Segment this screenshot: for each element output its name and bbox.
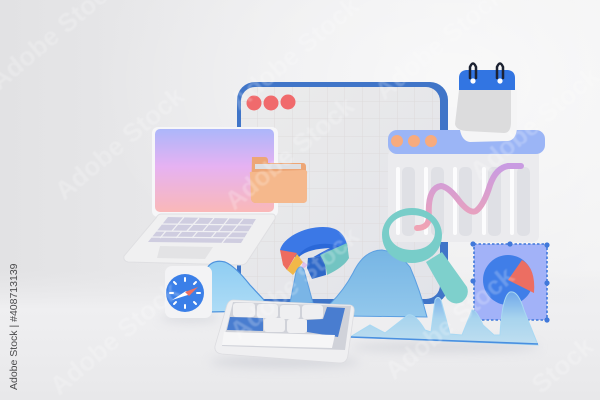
- donut blue top surface: [280, 227, 348, 258]
- pie chart: [483, 255, 533, 305]
- icon: blue mountain chart: [330, 250, 427, 317]
- window vertical bars: [402, 167, 530, 236]
- icon: wall calendar: [455, 64, 517, 142]
- icon: donut chart: [280, 227, 349, 279]
- laptop trackpad: [157, 246, 213, 259]
- magnifier ring: [382, 208, 442, 263]
- icon: small keypad: [215, 300, 354, 363]
- laptop base: [124, 214, 275, 265]
- icon: orange folder: [250, 157, 307, 203]
- icon: clock tile: [165, 266, 212, 318]
- icon: small arch chart: [290, 267, 313, 303]
- floor shadows: [160, 314, 540, 368]
- clock needle: [172, 291, 191, 300]
- keypad blue keys: [227, 307, 345, 337]
- watermark text: Adobe Stock tiling: Adobe Stock: [379, 260, 520, 386]
- magnifier handle: [426, 252, 468, 303]
- icon: pie chart card: [470, 241, 550, 323]
- keypad white keys: [233, 303, 323, 333]
- pink line curve: [417, 166, 521, 228]
- watermark text: Adobe Stock tiling: Adobe Stock: [224, 220, 365, 346]
- icon: laptop: [124, 127, 278, 265]
- stock ID caption: Adobe Stock | #408713139: [8, 263, 20, 390]
- icon: small blue mountain behind clock: [207, 261, 264, 312]
- calendar binder rings: [470, 64, 503, 78]
- watermark text: Adobe Stock tiling: Adobe Stock: [44, 275, 185, 400]
- icon: orange window dots: [391, 135, 437, 147]
- area chart: [350, 292, 538, 345]
- icon: red window dots: [246, 94, 296, 110]
- panel: browser chart window: [388, 130, 545, 242]
- window title bar: [388, 130, 545, 154]
- watermark text: Adobe Stock tiling: Stock: [525, 331, 599, 399]
- icon: magnifying glass: [382, 208, 468, 303]
- laptop screen: [155, 129, 274, 212]
- watermark text: Adobe Stock tiling: Adobe Stock: [49, 80, 190, 206]
- donut segments: [280, 250, 297, 270]
- watermark text: Adobe Stock tiling: Adobe Stock: [219, 90, 360, 216]
- donut hole: [298, 248, 330, 259]
- panel: grid board: [237, 82, 448, 304]
- window body: [388, 150, 539, 242]
- keypad space bar: [222, 332, 335, 348]
- laptop keyboard: [148, 217, 256, 243]
